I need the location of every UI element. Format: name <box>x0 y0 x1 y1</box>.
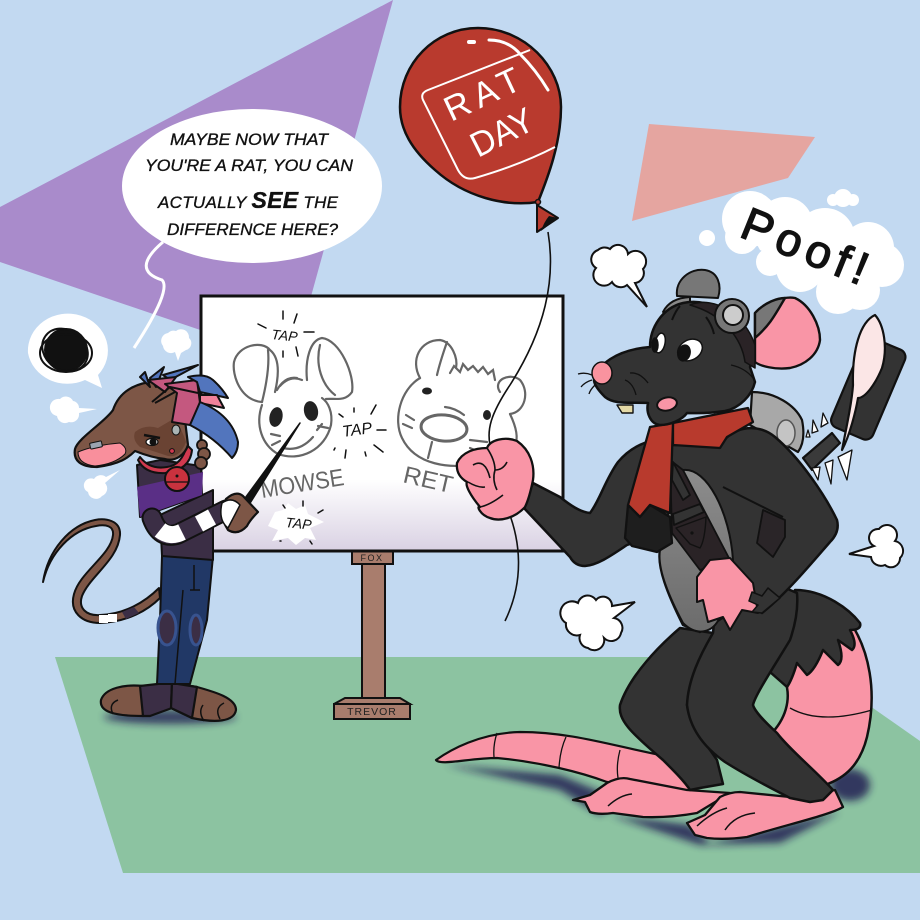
backpack <box>750 392 803 452</box>
rat eyes <box>422 388 491 420</box>
eyes <box>652 332 706 365</box>
grey belly <box>659 470 733 632</box>
front leg <box>687 560 833 802</box>
poof cloud <box>699 189 904 314</box>
back ear <box>755 298 820 369</box>
fist <box>457 439 533 520</box>
face patch <box>134 418 186 456</box>
sketch labels: TAP <box>271 326 299 345</box>
long tail <box>436 732 700 795</box>
feather <box>842 315 885 450</box>
whiteboard <box>201 296 563 551</box>
small rat character <box>43 365 300 724</box>
jetpack <box>750 315 908 484</box>
puff left <box>591 245 647 307</box>
cap band <box>690 302 755 368</box>
sketch labels: RET <box>401 462 456 499</box>
scribble <box>34 320 96 380</box>
hat <box>140 365 238 458</box>
balloon label: DAY <box>464 100 540 165</box>
big rat character <box>436 270 908 845</box>
whiskers <box>578 373 595 394</box>
mouse eyes <box>268 400 320 428</box>
ground shadow <box>104 710 236 724</box>
pointer stick <box>240 423 300 508</box>
puff lower <box>560 596 635 650</box>
harness straps <box>670 460 730 570</box>
wrist claws <box>749 588 780 613</box>
ear inner <box>78 443 126 466</box>
thick tail base <box>770 625 872 785</box>
sketch labels: MOWSE <box>259 464 346 504</box>
speech text: DIFFERENCE HERE? <box>167 220 339 239</box>
speech text: MAYBE NOW THAT <box>170 130 330 149</box>
tail <box>43 519 160 623</box>
tap tick marks <box>258 311 386 544</box>
braid <box>195 440 210 469</box>
sketch labels: TAP <box>341 420 374 441</box>
torso and right arm <box>659 428 838 632</box>
white puffs around small rat <box>50 329 191 499</box>
balloon string <box>489 232 550 621</box>
balloon label: RAT <box>438 60 527 129</box>
helmet top <box>663 270 719 313</box>
sketch labels <box>259 326 456 533</box>
scarf <box>625 408 753 552</box>
puff right <box>849 525 903 567</box>
speech text: YOU'RE A RAT, YOU CAN <box>145 156 354 175</box>
shadows <box>445 765 870 845</box>
left arm <box>523 440 690 566</box>
nose <box>592 362 612 384</box>
sketch labels: TAP <box>285 514 313 533</box>
tube <box>803 433 840 470</box>
head <box>594 302 755 425</box>
poof word: Poof! <box>734 197 876 295</box>
teeth <box>617 405 633 413</box>
balloon highlight <box>469 40 548 90</box>
green floor <box>55 657 920 873</box>
hand on hip <box>697 558 758 630</box>
speech text: ACTUALLY SEE THE <box>157 187 339 213</box>
shirt <box>137 460 213 560</box>
thought bubble <box>28 314 108 388</box>
paddle <box>829 335 908 442</box>
snout creases <box>625 365 753 395</box>
jeans <box>157 556 213 684</box>
TREVOR plate label: TREVOR <box>347 706 397 718</box>
balloon <box>400 28 561 232</box>
speech text <box>145 130 354 239</box>
hand <box>222 494 258 532</box>
speech bubble <box>122 109 382 348</box>
back leg <box>620 628 723 790</box>
fur at tail base <box>770 590 860 687</box>
rat sketch <box>398 340 525 466</box>
purple triangle <box>0 0 393 335</box>
back foot <box>573 778 730 817</box>
balloon label <box>438 60 540 165</box>
starburst <box>268 503 324 545</box>
goggle <box>715 299 749 333</box>
FOX plate label: FOX <box>360 553 384 563</box>
brows <box>672 306 714 334</box>
feet <box>101 682 236 721</box>
sleeve patch <box>757 510 785 557</box>
front foot <box>687 790 843 839</box>
bell <box>165 467 189 491</box>
mouth <box>656 396 678 412</box>
head <box>75 381 188 467</box>
salmon quadrilateral <box>632 124 815 221</box>
arm crease <box>723 487 783 517</box>
mouse sketch <box>234 338 352 456</box>
spark triangles <box>806 413 852 484</box>
collar <box>138 445 192 473</box>
balloon label frame <box>422 50 555 179</box>
striped arm <box>152 510 226 535</box>
easel stand <box>334 551 410 719</box>
